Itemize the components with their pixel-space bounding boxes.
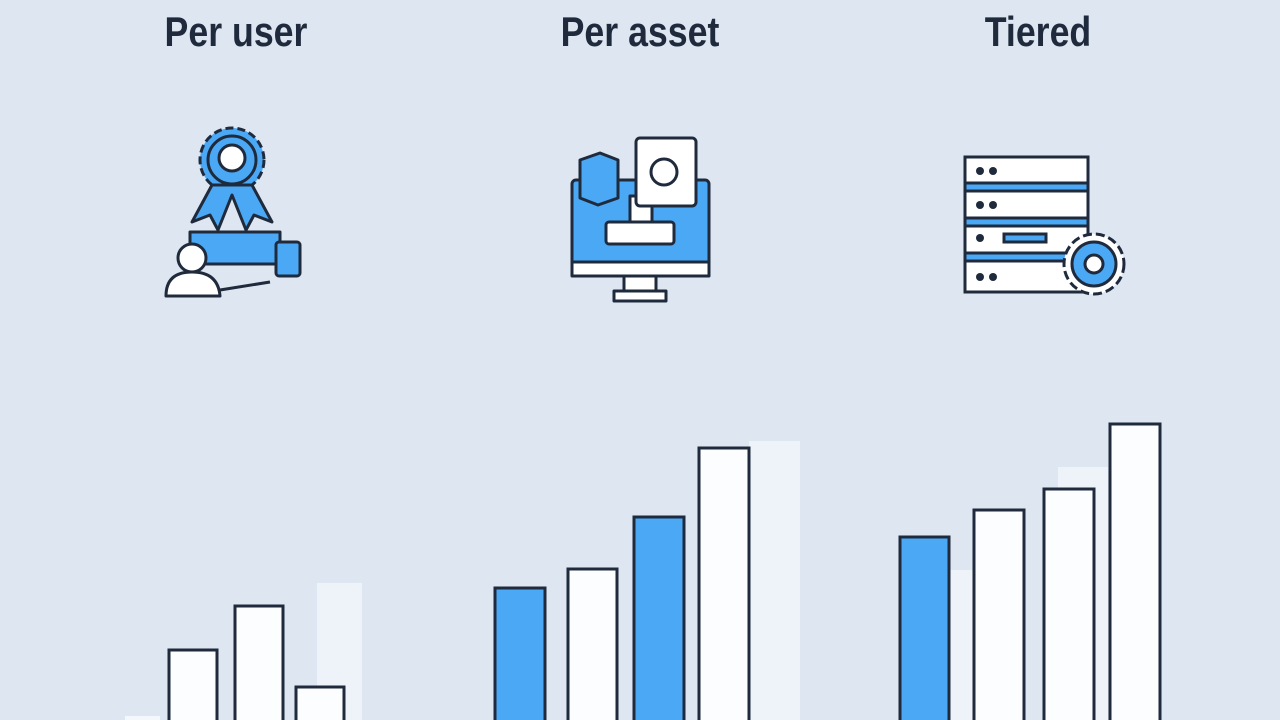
title: Per asset: Per asset <box>561 9 719 56</box>
icon: user award <box>166 128 300 296</box>
icon: monitor asset <box>572 138 709 301</box>
title: Tiered: Tiered <box>985 9 1091 56</box>
bar chart: Per asset <box>495 441 800 720</box>
bar chart: Tiered <box>900 424 1160 720</box>
title: Per user: Per user <box>165 9 307 56</box>
bar chart: Per user <box>125 583 362 720</box>
icon: server stack <box>965 157 1124 294</box>
